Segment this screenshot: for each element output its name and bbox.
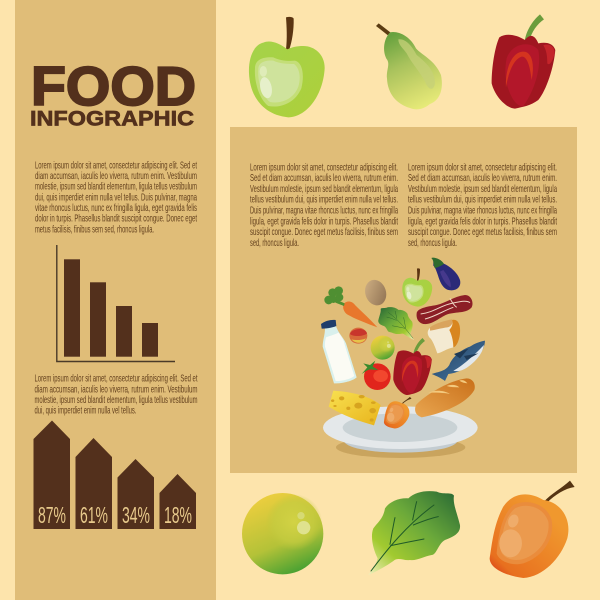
text block: centre left column: Vestibulum molestie, ipsum sed blandit elementum, ligula — [250, 184, 398, 195]
icon: red bell pepper — [492, 14, 555, 109]
baguette — [415, 378, 475, 417]
panel: centre — [230, 127, 577, 473]
text block: sidebar middle: diam accumsan, iaculis leo viverra, rutrum enim. Vestibulum — [34, 384, 198, 395]
eggplant — [431, 258, 460, 290]
illustration: food falling onto plate — [321, 258, 485, 458]
text block: sidebar middle: dui, quis imperdiet enim nulla vel tellus. — [34, 406, 136, 417]
icon: pear — [376, 23, 442, 109]
text block: sidebar top: diam accumsan, iaculis leo viverra, rutrum enim. Vestibulum — [35, 171, 197, 182]
arrow bar chart with percentages: 18% — [164, 502, 192, 528]
title: INFOGRAPHIC — [30, 108, 194, 130]
icon: green apple — [249, 17, 325, 117]
carrot — [324, 286, 377, 327]
bar chart — [57, 245, 175, 362]
icon: peach — [490, 481, 575, 578]
apple — [402, 268, 432, 307]
text block: centre left column: Lorem ipsum dolor sit amet, consectetur adipiscing elit. — [250, 162, 398, 173]
arrow bar chart with percentages: 87% — [38, 502, 66, 528]
bell pepper — [393, 338, 432, 395]
text block: sidebar top: vitae rhoncus luctus, nunc ex fringilla ligula, eget gravida felis — [35, 203, 197, 214]
small red apple — [349, 328, 367, 344]
title: FOOD — [31, 55, 196, 117]
text block: sidebar top: dui, quis imperdiet enim nulla vel tellus. Duis pulvinar, magna — [35, 192, 197, 203]
arrow bar chart with percentages — [34, 420, 196, 529]
potato — [362, 277, 390, 308]
text block: sidebar top: dolor in turpis. Phasellus blandit suscipit congue. Donec eget — [35, 214, 197, 225]
text block: centre left column: tellus vestibulum dui, quis imperdiet enim nulla vel tellus. — [250, 195, 398, 206]
text block: sidebar top: metus facilisis, finibus sem sed, rhoncus ligula. — [35, 224, 154, 235]
text block: sidebar top: molestie, ipsum sed blandit elementum, ligula tellus vestibulum — [35, 182, 197, 193]
text block: sidebar middle: Lorem ipsum dolor sit amet, consectetur adipiscing elit. Sed et — [34, 374, 198, 385]
text block: centre left column: ligula, eget gravida felis dolor in turpis. Phasellus blandit — [250, 216, 398, 227]
milk bottle — [321, 320, 357, 383]
icon: lettuce leaf — [368, 491, 460, 575]
plate — [323, 406, 478, 458]
text block: sidebar top: Lorem ipsum dolor sit amet, consectetur adipiscing elit. Sed et — [35, 160, 197, 171]
lime — [371, 336, 395, 360]
text block: centre right column: sed, rhoncus ligula. — [408, 238, 457, 249]
panel: left sidebar — [15, 0, 216, 600]
tomato — [362, 361, 391, 390]
meat — [417, 295, 473, 324]
text block: sidebar middle — [34, 374, 198, 417]
lettuce leaf — [378, 307, 414, 340]
arrow bar chart with percentages: 61% — [80, 502, 108, 528]
text block: centre left column: sed, rhoncus ligula. — [250, 238, 299, 249]
text block: sidebar top — [35, 160, 197, 235]
peach — [384, 397, 412, 428]
text block: centre left column: Duis pulvinar, magna vitae rhoncus luctus, nunc ex fringilla — [250, 206, 398, 216]
text block: centre left column: Sed et diam accumsan, iaculis leo viverra, rutrum enim. — [250, 173, 398, 184]
text block: centre right column — [408, 162, 557, 249]
text block: sidebar middle: molestie, ipsum sed blandit elementum, ligula tellus vestibulum — [34, 395, 198, 406]
cheese — [329, 391, 381, 425]
bread — [428, 319, 460, 353]
text block: centre left column: suscipit congue. Donec eget metus facilisis, finibus sem — [250, 227, 398, 238]
arrow bar chart with percentages: 34% — [122, 502, 150, 528]
text block: centre left column — [250, 162, 398, 249]
icon: lime — [242, 493, 323, 574]
fish — [432, 341, 485, 381]
